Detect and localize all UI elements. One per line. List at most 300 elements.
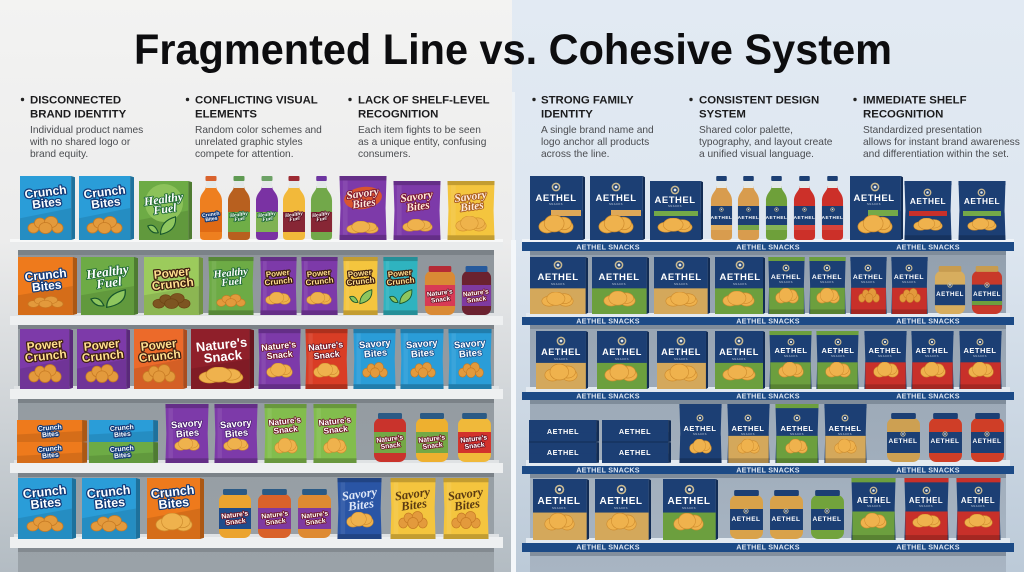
Aethel box green: AETHEL [668,496,710,507]
Savory Bites bag yellow: Bites [452,496,481,514]
Nature's Snack jar [258,489,291,538]
Aethel bottle tan [738,176,759,240]
Aethel bag tan: SNACKS [838,432,852,436]
Savory Bites bag purple: Bites [176,427,200,440]
Aethel bag red: AETHEL [868,346,902,355]
Aethel bottle green: AETHEL [766,215,787,220]
point: conflicting visual elements: Random color schemes and [195,125,322,136]
Crunch Bites box [20,176,75,240]
Aethel bag red: AETHEL [853,274,883,281]
Power Crunch box purple: Crunch [81,347,124,365]
Aethel bag red [904,478,949,540]
Aethel box: AETHEL [854,193,894,204]
Nature's Snack bag purple: Snack [266,349,293,361]
Power Crunch bag yellow [343,257,378,315]
point: strong family identity: STRONG FAMILY [541,94,634,106]
Healthy Fuel box [139,181,192,240]
Power Crunch box: Power [153,264,191,282]
Aethel box green: SNACKS [733,282,747,286]
stacked Crunch Bites boxes blue and green [89,420,158,463]
Savory Bites bag blue: Bites [411,347,435,360]
Nature's Snack jar [416,413,448,462]
Aethel bag red tag: AETHEL [910,196,946,206]
shelf row 4: Aethel products [529,404,1004,463]
Crunch Bites box blue: Crunch [22,483,67,501]
Nature's Snack jar: Nature's [376,434,404,445]
Savory Bites bag purple: Bites [350,196,377,212]
Aethel bag red [864,331,907,389]
Nature's Snack jar: Snack [265,518,286,527]
stacked Aethel boxes [529,420,599,463]
Nature's Snack jar: Nature's [301,510,329,521]
Power Crunch box purple [77,329,130,389]
Savory Bites bag blue: Bites [364,347,388,360]
bottle amber [228,176,250,240]
Nature's Snack jar: Snack [464,442,485,451]
bottle amber: Healthy [229,211,249,219]
Power Crunch bag yellow: Power [347,268,372,279]
Healthy Fuel bag: Healthy [212,266,249,281]
Aethel bag green: AETHEL [771,274,801,281]
Nature's Snack bag green: Nature's [268,415,302,428]
Aethel bottle red: AETHEL [794,215,815,220]
stacked Crunch Bites boxes orange: Bites [42,431,59,439]
Aethel bag red: SNACKS [973,354,987,358]
Aethel box: AETHEL [654,195,696,206]
Aethel bag green [775,404,819,463]
Aethel box tan: SNACKS [551,282,565,286]
point: strong family identity [532,94,654,160]
Aethel bag green [769,331,812,389]
Savory Bites bag yellow: Savory [394,485,431,503]
Power Crunch box purple: Crunch [24,347,67,365]
Crunch Bites box [79,176,134,240]
Aethel bag red: SNACKS [919,504,933,508]
Aethel box tan: SNACKS [674,357,688,361]
Aethel bag red: AETHEL [894,274,924,281]
Power Crunch box orange: Crunch [138,347,181,365]
Aethel box tan: SNACKS [614,506,628,510]
Aethel box green [592,257,649,314]
shelf row 5: Aethel products [533,478,1001,540]
stacked Aethel boxes: AETHEL [547,448,579,457]
Aethel bag red: AETHEL [964,346,996,355]
Aethel bag red [911,331,954,389]
Aethel jar tan: AETHEL [772,516,800,523]
Aethel bottle red [822,176,843,240]
point: disconnected brand identity [21,94,143,160]
Aethel bottle tan: AETHEL [711,215,732,220]
Aethel bag red: AETHEL [916,346,948,355]
point: disconnected brand identity: Individual product names [30,125,143,136]
Nature's Snack jar: Snack [422,442,443,451]
Aethel jar red [929,413,962,462]
Aethel jar red: AETHEL [930,438,960,445]
Aethel box [530,176,585,240]
Aethel box: SNACKS [867,202,881,206]
right shelves with brand strips: AETHEL SNACKS [896,392,960,400]
Aethel box tan: SNACKS [552,506,566,510]
right shelves with brand strips: AETHEL SNACKS [896,542,960,552]
Aethel jar tan [887,413,920,462]
Aethel box: SNACKS [668,204,682,208]
Aethel jar red: AETHEL [972,438,1002,445]
Nature's Snack jar: Nature's [261,510,289,521]
Aethel bag red: AETHEL [961,496,995,505]
right shelves with brand strips [522,239,1014,556]
Power Crunch box: Crunch [151,275,194,293]
stacked Crunch Bites boxes orange [17,420,87,463]
bottle purple: Healthy [257,211,277,219]
Aethel bag green [851,478,896,540]
point: consistent design system [689,94,833,160]
Aethel box tan: SNACKS [674,282,688,286]
Nature's Snack bag red [305,329,348,389]
Aethel box: SNACKS [549,202,563,206]
Crunch Bites box orange: Bites [31,277,62,294]
Aethel bag red [956,478,1001,540]
Savory Bites bag yellow: Bites [399,496,428,514]
bottle yellow: Healthy [284,211,304,219]
Aethel box tan [654,257,710,314]
point: conflicting visual elements [186,94,322,160]
Power Crunch bag purple: Power [306,268,331,279]
Healthy Fuel box [81,257,138,315]
Nature's Snack jar: Snack [225,518,246,527]
point: consistent design system: SYSTEM [699,108,746,120]
Aethel bag green: SNACKS [867,504,881,508]
point: lack of shelf-level recognition [348,94,490,160]
Crunch Bites box orange [18,257,77,315]
Aethel bag red: AETHEL [909,496,943,505]
Savory Bites bag blue: Savory [454,338,487,351]
Aethel box tan [533,479,589,540]
point: strong family identity: across the line. [541,149,610,160]
Aethel box tan [595,479,651,540]
point: consistent design system: typography, and layout create [699,137,833,148]
Healthy Fuel box: Healthy [84,261,130,282]
Nature's Snack bag green: Nature's [318,415,352,428]
point: lack of shelf-level recognition: Each item fights to be seen [358,125,481,136]
left shelves [10,239,503,552]
stacked Aethel boxes: AETHEL [547,427,579,436]
bottle purple [256,176,278,240]
Crunch Bites box orange [147,478,204,539]
Nature's Snack bag purple: Nature's [261,339,297,353]
Power Crunch box orange: Power [140,336,178,354]
bottle green: Fuel [316,216,328,223]
right shelves with brand strips: AETHEL SNACKS [576,466,640,474]
Crunch Bites box blue: Crunch [86,483,131,501]
shelf row 2: fragmented products [18,257,491,315]
bottle orange: Crunch [202,211,220,219]
Aethel bag tan [824,404,867,463]
right shelves with brand strips: AETHEL SNACKS [736,316,800,326]
Aethel box [590,176,645,240]
Aethel bag green: SNACKS [790,432,804,436]
point: conflicting visual elements: unrelated graphic styles [195,137,303,148]
Nature's Snack jar [462,266,491,315]
Nature's Snack box [191,329,254,389]
right shelves with brand strips: AETHEL SNACKS [576,316,640,326]
Aethel bag green: AETHEL [774,346,808,355]
Savory Bites bag purple: Savory [400,189,434,205]
Aethel box: AETHEL [596,193,636,204]
Aethel bag tan [727,404,770,463]
point: disconnected brand identity: brand equity. [30,149,88,160]
Savory Bites bag yellow [443,478,489,539]
Healthy Fuel bag: Fuel [220,276,242,289]
Aethel bag green [816,331,859,389]
point: lack of shelf-level recognition: LACK OF SHELF-LEVEL [358,94,490,106]
right shelves with brand strips: AETHEL SNACKS [736,242,800,252]
Aethel bag green tag [958,181,1006,240]
Nature's Snack jar [298,489,331,538]
point: strong family identity: logo anchor all products [541,137,649,148]
Aethel bottle tan: AETHEL [738,215,759,220]
Crunch Bites box: Bites [31,194,63,212]
Nature's Snack jar: Snack [431,295,451,305]
Aethel bag navy [679,404,722,463]
Nature's Snack bag green [264,404,307,463]
stacked Crunch Bites boxes orange: Crunch [38,424,62,433]
Aethel box green: AETHEL [719,347,759,357]
Savory Bites bag navy [337,478,382,539]
Power Crunch bag purple: Power [265,268,290,279]
Aethel box tan: AETHEL [660,272,702,283]
point: immediate shelf recognition [853,94,1020,160]
Savory Bites bag blue [448,329,492,389]
Savory Bites bag purple: Bites [404,199,431,215]
Aethel bag navy: AETHEL [684,424,716,433]
Aethel box tan: AETHEL [538,496,580,507]
Savory Bites bag purple: Savory [171,418,204,431]
Aethel box green: SNACKS [615,357,629,361]
Power Crunch box [144,257,203,315]
point: disconnected brand identity: DISCONNECTED [30,94,121,106]
Aethel box tan: SNACKS [554,357,568,361]
Savory Bites bag purple [339,176,387,240]
Aethel bag red: SNACKS [925,354,939,358]
point: consistent design system: CONSISTENT DESIGN [699,94,819,106]
Crunch Bites box blue: Bites [30,495,62,512]
Aethel box green [715,257,765,314]
Aethel bag navy: SNACKS [693,432,707,436]
Nature's Snack jar: Snack [380,442,401,451]
panel: fragmented line points [21,94,490,160]
Aethel bag red: SNACKS [861,280,875,284]
point: conflicting visual elements: ELEMENTS [195,108,257,120]
Aethel bottle tan [711,176,732,240]
Power Crunch bag yellow: Crunch [346,276,375,287]
Power Crunch bag teal [383,257,418,315]
shelf row 3: Aethel products [536,331,1002,389]
Power Crunch bag teal: Power [387,268,412,279]
Aethel box tan [536,331,588,389]
Aethel box tan: AETHEL [538,272,578,283]
point: consistent design system: Shared color palette, [699,125,793,136]
Aethel jar red [972,266,1002,314]
Aethel box green [663,479,718,540]
stacked Aethel boxes: AETHEL [619,427,651,436]
bottle green [311,176,332,240]
Nature's Snack bag green [313,404,357,463]
Aethel jar green [811,490,844,539]
panel: cohesive system points [532,94,1020,160]
Power Crunch bag purple [260,257,297,315]
point: consistent design system: a unified visual language. [699,149,814,160]
point: strong family identity: A single brand name and [541,125,654,136]
Nature's Snack bag green: Snack [323,424,349,436]
Aethel box green [715,331,765,389]
Aethel bag green: AETHEL [812,274,842,281]
Aethel bag green: SNACKS [779,280,793,284]
Aethel bag green: AETHEL [822,346,854,355]
Savory Bites bag navy: Bites [346,496,375,514]
Savory Bites bag purple [165,404,209,463]
Savory Bites bag yellow: Savory [447,485,484,503]
Aethel bag green: SNACKS [784,354,798,358]
Aethel box green [597,331,649,389]
Nature's Snack jar: Snack [467,295,487,305]
Aethel bottle green [766,176,787,240]
right shelves with brand strips: AETHEL SNACKS [896,466,960,474]
point: conflicting visual elements: CONFLICTING VISUAL [195,94,318,106]
Power Crunch bag purple: Crunch [305,276,334,287]
point: strong family identity: IDENTITY [541,108,593,120]
Savory Bites bag purple [214,404,258,463]
Crunch Bites box: Crunch [83,183,126,202]
Aethel bag red [959,331,1002,389]
Nature's Snack jar [458,413,491,462]
Power Crunch bag purple [301,257,338,315]
Aethel bag green [809,257,846,314]
Savory Bites bag blue: Savory [359,338,392,351]
stacked Crunch Bites boxes blue and green: Bites [114,431,131,439]
Savory Bites bag yellow: Bites [458,199,485,215]
Aethel bag tan: AETHEL [828,424,862,433]
Aethel bag green tag: AETHEL [964,196,1000,206]
Aethel jar green: AETHEL [812,516,842,523]
Aethel bottle red: AETHEL [822,215,843,220]
bottle green: Healthy [311,211,331,219]
Aethel box green: SNACKS [612,282,626,286]
Power Crunch box purple: Power [26,336,64,354]
right shelves with brand strips: AETHEL SNACKS [576,392,640,400]
stacked Aethel boxes [602,420,671,463]
Healthy Fuel bag [208,257,254,315]
point: lack of shelf-level recognition: RECOGNITION [358,108,438,120]
Aethel box tan: AETHEL [541,347,581,357]
Healthy Fuel box: Fuel [151,200,178,218]
bottle yellow [283,176,305,240]
point: disconnected brand identity: with no shared logo or [29,137,131,148]
Aethel bag green: AETHEL [857,496,891,505]
Aethel bag red [891,257,928,314]
shelf row 2: Aethel products [530,257,1002,314]
Power Crunch bag purple: Crunch [264,276,293,287]
Savory Bites bag purple: Savory [346,186,380,202]
Power Crunch box purple: Power [83,336,121,354]
Aethel bag red: SNACKS [902,280,916,284]
stacked Crunch Bites boxes orange: Bites [42,452,59,460]
Crunch Bites box orange: Bites [158,495,190,512]
Nature's Snack jar: Snack [305,518,326,527]
stacked Aethel boxes: AETHEL [619,448,651,457]
Aethel box [650,181,703,240]
point: lack of shelf-level recognition: as a unique entity, confusing [358,137,487,148]
point: conflicting visual elements: compete for attention. [195,149,294,160]
Aethel bag tan: SNACKS [741,432,755,436]
Aethel box tan: AETHEL [661,347,701,357]
Nature's Snack jar: Nature's [418,434,446,445]
Savory Bites bag blue [400,329,444,389]
Aethel jar tan [730,490,763,539]
title: Fragmented Line vs. Cohesive System [134,26,892,74]
stacked Crunch Bites boxes blue and green: Crunch [110,445,134,454]
Aethel bag green [768,257,805,314]
Aethel bag red: SNACKS [971,504,985,508]
Aethel box tan: AETHEL [600,496,642,507]
Savory Bites bag navy: Savory [341,485,378,503]
Aethel box green: AETHEL [720,272,760,283]
Crunch Bites box blue: Bites [94,495,126,512]
Nature's Snack jar [425,266,455,315]
Nature's Snack jar [219,489,251,538]
bottle orange: Bites [205,216,218,223]
bottle orange [200,176,222,240]
Healthy Fuel box: Fuel [94,273,123,292]
bottle yellow: Fuel [289,216,301,223]
point: disconnected brand identity: BRAND IDENTITY [30,108,127,120]
right shelves with brand strips: AETHEL SNACKS [736,466,800,474]
Aethel bag red tag [904,181,952,240]
Aethel jar tan: AETHEL [936,291,964,298]
stacked Crunch Bites boxes orange: Crunch [38,445,62,454]
Aethel bag green: SNACKS [831,354,845,358]
right shelves with brand strips: AETHEL SNACKS [736,542,800,552]
Crunch Bites box blue [18,478,76,539]
point: immediate shelf recognition: RECOGNITION [863,108,943,120]
Nature's Snack bag purple [258,329,301,389]
Aethel box [850,176,903,240]
Savory Bites bag yellow: Savory [454,189,488,205]
point: immediate shelf recognition: IMMEDIATE SHELF [863,94,967,106]
Nature's Snack jar: Nature's [221,510,249,521]
Aethel box: AETHEL [536,193,576,204]
shelf row 1: Aethel products [530,176,1006,240]
Aethel box green: SNACKS [682,506,696,510]
Savory Bites bag blue [353,329,396,389]
Aethel bag green: AETHEL [780,424,814,433]
Crunch Bites box: Bites [90,194,122,212]
Nature's Snack box: Snack [203,347,243,366]
Crunch Bites box orange: Crunch [150,483,195,501]
Aethel box tan [530,257,588,314]
point: immediate shelf recognition: and differentiation within the set. [863,149,1009,160]
Nature's Snack bag red: Nature's [308,339,344,353]
Savory Bites bag blue: Bites [459,347,483,360]
shelf row 5: fragmented products [18,478,489,539]
right shelves with brand strips: AETHEL SNACKS [576,542,640,552]
Power Crunch box purple [20,329,73,389]
Savory Bites bag purple: Bites [225,427,249,440]
Aethel box: SNACKS [609,202,623,206]
Power Crunch bag teal: Crunch [386,276,415,287]
Crunch Bites box blue [82,478,140,539]
Nature's Snack jar: Nature's [427,288,453,299]
Savory Bites bag yellow [390,478,436,539]
